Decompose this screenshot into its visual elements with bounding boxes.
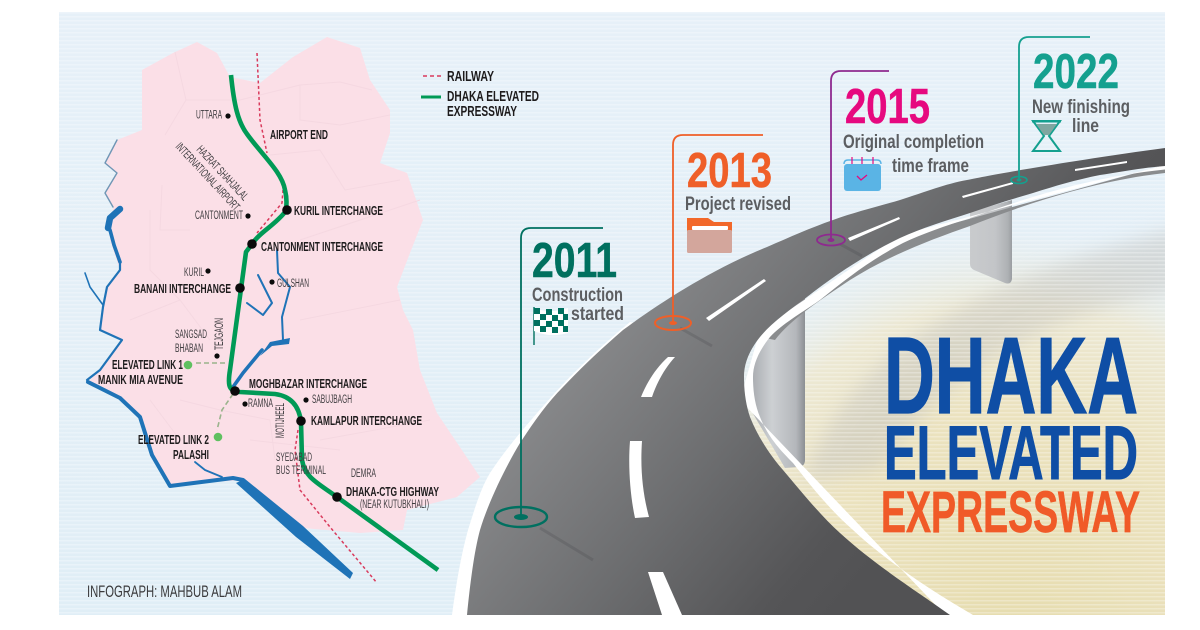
milestone: 2015: time frame: [892, 156, 969, 177]
map: place labels: MANIK MIA AVENUE: [98, 372, 183, 387]
pillar: right: [970, 200, 1012, 284]
map: place labels: KURIL INTERCHANGE: [294, 203, 383, 218]
milestone: 2011: Construction: [532, 285, 623, 306]
icon: hourglass: [1032, 120, 1061, 151]
map: elevated link connectors: [196, 363, 233, 430]
map: place labels: UTTARA: [196, 110, 222, 122]
legend: [421, 69, 539, 120]
milestone: 2015: 2015: [845, 80, 930, 134]
milestone: 2013: [655, 135, 791, 330]
map: place labels: TEJGAON: [214, 318, 226, 350]
map: place labels: DEMRA: [351, 468, 376, 480]
road: inner white edge: [740, 165, 1165, 615]
milestone: 2013: Project revised: [685, 194, 791, 215]
road: lane markings: [629, 161, 1127, 615]
map: place labels: AIRPORT END: [270, 127, 328, 142]
map: place labels: ELEVATED LINK 1: [112, 357, 183, 372]
map: place labels: HAZRAT SHAHJALAL: [194, 144, 251, 204]
map: place labels: KAMLAPUR INTERCHANGE: [311, 413, 422, 428]
map: place labels: BUS TERMINAL: [276, 465, 326, 477]
map: place labels: DHAKA-CTG HIGHWAY: [346, 484, 439, 499]
map: river estuary: [236, 479, 353, 579]
map: place labels: PALASHI: [173, 447, 209, 462]
map: place labels: SYEDABAD: [276, 452, 312, 464]
map: city area: [88, 37, 480, 533]
panel: map: [85, 37, 480, 583]
map: place labels: INTERNATIONAL AIRPORT: [173, 141, 242, 213]
map: place labels: (NEAR KUTUBKHALI): [360, 499, 429, 511]
milestone: 2015: Original completion: [843, 132, 984, 153]
milestone: 2011: started: [571, 304, 624, 325]
map: place labels: MOGHBAZAR INTERCHANGE: [249, 376, 367, 391]
milestone: 2013: 2013: [687, 144, 772, 198]
road: asphalt: [467, 148, 1165, 615]
map: elevated expressway line: [229, 75, 438, 570]
map: place labels: CANTONMENT: [195, 210, 243, 222]
map: place labels: MOTIJHEEL: [275, 403, 287, 438]
milestone: 2011: 2011: [532, 234, 617, 288]
milestone: 2015: [817, 71, 984, 246]
map: rivers: [85, 140, 290, 486]
map: road network: [130, 52, 430, 460]
road: [452, 148, 1165, 615]
map: place labels: BANANI INTERCHANGE: [134, 281, 231, 296]
credit: INFOGRAPH: MAHBUB ALAM: [87, 582, 242, 601]
map: railway line: [257, 53, 377, 583]
map: river lake: [260, 338, 290, 356]
milestone: 2022: 2022: [1033, 45, 1119, 99]
icon: calendar: [844, 157, 881, 191]
map: place labels: CANTONMENT INTERCHANGE: [261, 239, 383, 254]
map: place labels: RAMNA: [248, 398, 273, 410]
milestone: 2022: [1011, 37, 1130, 184]
map: place labels: BHABAN: [175, 343, 203, 355]
road: left white edge: [452, 322, 650, 615]
map: interchange dots: [205, 113, 342, 502]
road: marker shadows: [540, 244, 862, 560]
road: under-deck strip: [760, 165, 1165, 340]
milestone: 2011: [495, 228, 624, 527]
map: elevated link dots: [184, 361, 222, 441]
milestone: 2022: line: [1072, 116, 1099, 137]
map: place labels: ELEVATED LINK 2: [138, 432, 209, 447]
title: [881, 315, 1140, 545]
map: place labels: KURIL: [184, 267, 204, 279]
map: place labels: GULSHAN: [277, 278, 309, 290]
pillar: left: [745, 298, 805, 468]
icon: folder: [687, 218, 732, 253]
legend: EXPRESSWAY: [447, 104, 517, 120]
map: place labels: SABUJBAGH: [312, 394, 352, 406]
legend: RAILWAY: [447, 69, 494, 85]
legend: DHAKA ELEVATED: [447, 89, 539, 105]
map: place labels: [98, 110, 439, 511]
milestone: 2022: New finishing: [1032, 97, 1130, 118]
icon: checkered flag: [534, 307, 568, 345]
map: place labels: SANGSAD: [175, 329, 207, 341]
